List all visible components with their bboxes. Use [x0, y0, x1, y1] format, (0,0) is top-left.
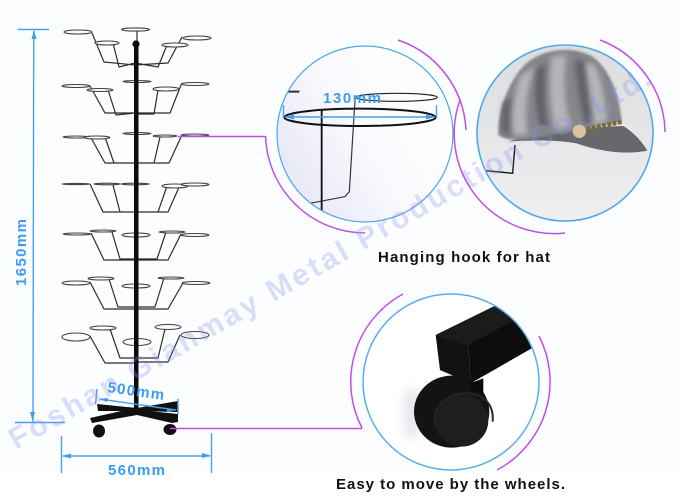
hook wire — [487, 145, 515, 173]
square tube — [436, 306, 532, 382]
decorative arcs — [266, 40, 466, 233]
panel: hat on hook photo — [454, 40, 665, 234]
ring photo — [284, 92, 437, 212]
rack tier 5 — [63, 230, 209, 260]
dimension: base width 560mm — [62, 433, 212, 479]
caption: hook: Hanging hook for hat — [378, 249, 550, 266]
panel: hook ring detail — [266, 40, 466, 233]
dimension: height 1650mm: 1650mm — [13, 219, 30, 286]
cross base with casters — [90, 401, 178, 438]
hat visor — [508, 126, 647, 153]
product drawing: rotating hat rack — [62, 28, 211, 438]
dimension: base depth 500mm — [96, 379, 178, 414]
rack tier 2 — [62, 80, 209, 115]
watermark: Foshan Gianmay Metal Production Co.,Ltd. — [3, 61, 657, 456]
callout line: caster to wheel detail — [170, 428, 362, 430]
rack tier 4 — [62, 183, 209, 212]
hat crown — [498, 50, 622, 140]
rack tier 7 — [62, 324, 209, 363]
rack tier 1 — [64, 28, 211, 67]
wheel — [414, 376, 489, 448]
dimension: base width 560mm: 560mm — [108, 462, 165, 479]
rack tier 3 — [63, 132, 209, 163]
decorative arcs — [454, 40, 665, 234]
panel: caster wheel photo — [351, 294, 550, 470]
wheel shadow — [403, 387, 420, 440]
dimension: base depth 500mm: 500mm — [106, 379, 165, 404]
dimension: ring 130mm — [284, 90, 436, 120]
rack tier 6 — [62, 277, 210, 309]
decorative arcs — [351, 294, 550, 470]
callout line: rack to hook detail — [178, 136, 266, 138]
centre pole — [132, 40, 140, 408]
caption: wheels: Easy to move by the wheels. — [336, 476, 565, 493]
dimension: ring 130mm: 130mm — [323, 90, 381, 107]
hat band beads — [587, 122, 622, 129]
dimension: height 1650mm — [13, 30, 65, 422]
